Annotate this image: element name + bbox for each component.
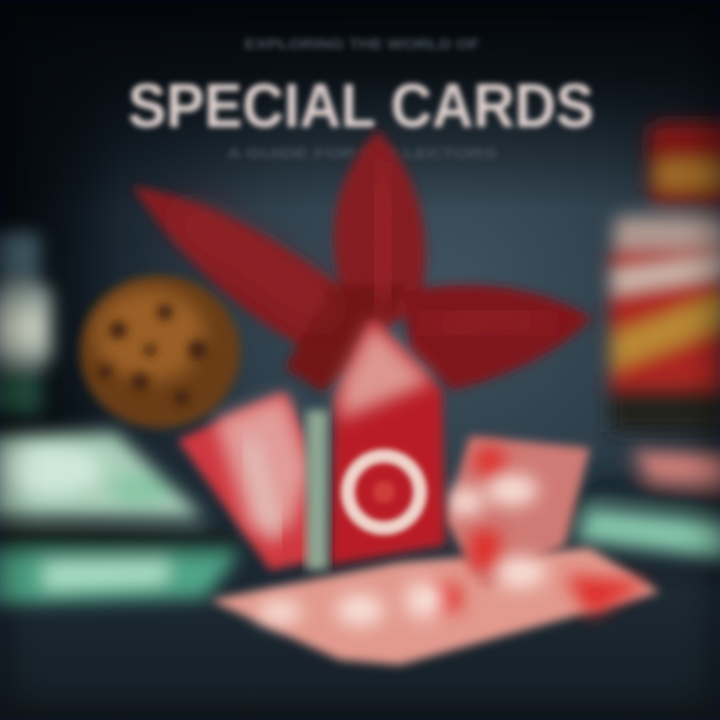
icon: cookie xyxy=(80,276,240,428)
illustration: green banknotes at right xyxy=(530,450,720,560)
caption below title: A GUIDE FOR COLLECTORS xyxy=(227,145,497,161)
icon: green bottle at left xyxy=(0,232,52,414)
illustration: green banknotes at left xyxy=(0,432,240,604)
illustration: red maple leaf xyxy=(132,130,592,392)
illustration: patterned card on floor xyxy=(210,436,660,665)
icon: red and gold jar at right xyxy=(610,122,720,432)
illustration: red card box xyxy=(178,318,445,570)
title: SPECIAL CARDS xyxy=(128,72,594,141)
subtitle above title: EXPLORING THE WORLD OF xyxy=(244,36,480,53)
